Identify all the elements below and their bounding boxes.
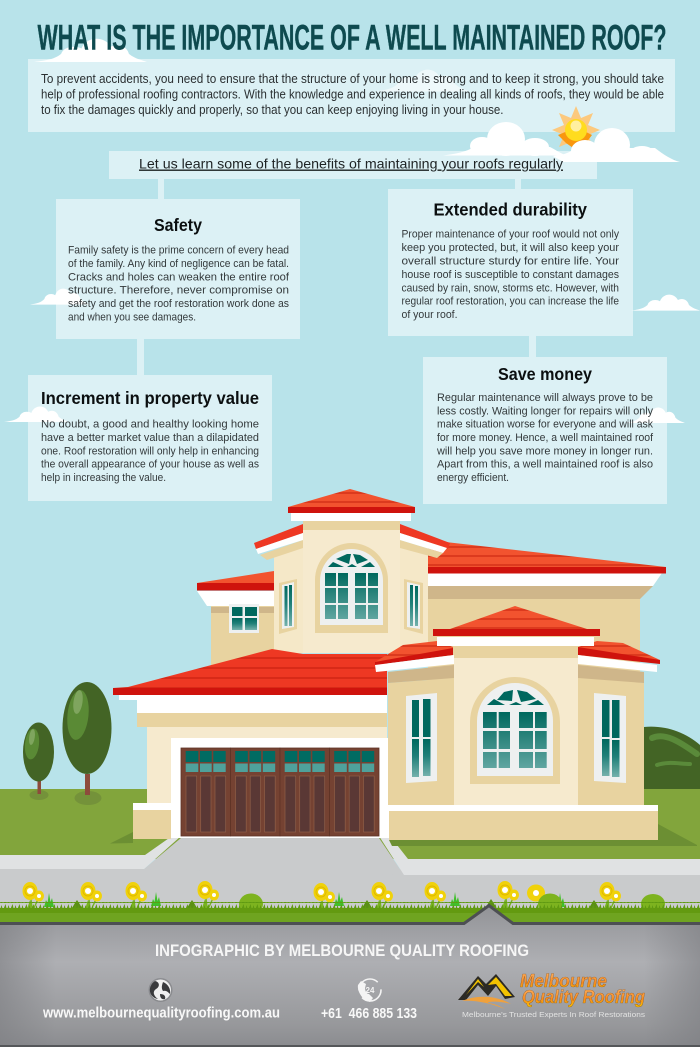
- grass tufts: [44, 892, 599, 908]
- window: front arched: [470, 677, 560, 784]
- house: ground shadows: [110, 824, 697, 846]
- cloud: right lower: [625, 408, 685, 423]
- logo: [458, 971, 645, 1019]
- house: upper right wing: [428, 540, 666, 684]
- window: tower right: [404, 579, 423, 634]
- cloud: top left: [34, 39, 147, 62]
- logo text: [520, 971, 645, 1007]
- house: garage wall: [133, 713, 389, 839]
- icon: globe: [148, 978, 172, 1002]
- panel: safety: [56, 199, 300, 339]
- safety text: safety and get the roof restoration work done as: [68, 298, 289, 310]
- panel: increment in property value: [28, 375, 272, 501]
- increment text: one. Roof restoration will only help in enhancing: [41, 445, 259, 457]
- icon: phone 24: 24: [366, 986, 375, 995]
- right side roof: [578, 641, 660, 672]
- hill: [644, 727, 700, 789]
- panel: introduction: [28, 59, 675, 132]
- save money text: energy efficient.: [437, 472, 509, 484]
- save money text: will help you save more money in longer run.: [436, 445, 653, 457]
- heading: increment in property value: Increment in property value: [41, 388, 259, 408]
- safety text: and when you see damages.: [68, 311, 196, 323]
- save money text: [436, 392, 654, 484]
- logo tagline: Melbourne's Trusted Experts In Roof Restorations: [462, 1010, 645, 1019]
- intro text: to fix the damages quickly and properly, so that you can keep enjoying living in your house.: [41, 102, 504, 117]
- tree: large: [62, 682, 112, 805]
- sidewalk and road: [0, 836, 700, 914]
- save money text: Apart from this, a well maintained roof is also: [437, 459, 653, 471]
- website: www.melbournequalityroofing.com.au: [42, 1006, 280, 1022]
- flowers: [22, 881, 621, 910]
- intro text: [41, 71, 664, 117]
- cloud: left middle: [30, 289, 90, 305]
- left side roof: [375, 641, 454, 672]
- panel: extended durability: [388, 189, 633, 336]
- cloud: left lower: [4, 407, 69, 422]
- house: upper left wing: [197, 571, 274, 666]
- subheading text: Let us learn some of the benefits of maintaining your roofs regularly: [139, 156, 563, 172]
- footer heading: INFOGRAPHIC BY MELBOURNE QUALITY ROOFING: [155, 942, 529, 960]
- cloud: sun right cloud: [553, 128, 680, 162]
- logo text: Quality Roofing: [522, 987, 645, 1007]
- window: front left: [406, 693, 437, 783]
- connectors between panels: [137, 179, 536, 375]
- durability text: house roof is susceptible to constant damages: [402, 269, 619, 281]
- cloud: right middle: [631, 295, 700, 311]
- window: front right: [594, 693, 626, 783]
- increment text: No doubt, a good and healthy looking home: [41, 419, 259, 431]
- durability text: regular roof restoration, you can increase the life: [402, 296, 619, 308]
- safety text: structure. Therefore, never compromise on: [68, 285, 289, 297]
- safety text: Family safety is the prime concern of every head: [68, 244, 289, 256]
- durability text: overall structure sturdy for entire life. Your: [402, 255, 619, 267]
- increment text: [41, 419, 259, 484]
- tree: small: [23, 722, 54, 800]
- panel: save money: [423, 357, 667, 504]
- safety text: Cracks and holes can weaken the entire roof: [68, 271, 290, 283]
- panel: subheading: [109, 151, 597, 179]
- cloud: behind intro panel: [375, 70, 470, 92]
- house: garage door: [181, 748, 379, 836]
- logo text: Melbourne: [520, 971, 607, 991]
- footer background with roof notch: [0, 906, 700, 1047]
- durability text: of your roof.: [402, 309, 458, 321]
- footer: [0, 906, 700, 1047]
- window: upper left wing: [229, 604, 259, 633]
- front roof: [433, 606, 600, 646]
- sun: [552, 106, 600, 154]
- increment text: have a better market value than a dilapidated: [41, 432, 259, 444]
- durability text: keep you protected, but, it will also keep your: [402, 242, 619, 254]
- icon: phone 24: [358, 979, 381, 1002]
- heading: save money: Save money: [498, 364, 592, 384]
- save money text: make situation worse for everyone and will ask: [437, 419, 653, 431]
- house: main lower roof: [113, 649, 387, 713]
- heading: safety: Safety: [154, 215, 202, 235]
- grass band: [0, 902, 700, 922]
- flowers and plants strip: [0, 881, 700, 922]
- durability text: Proper maintenance of your roof would not only: [402, 229, 619, 241]
- house: front right wing: [375, 606, 660, 840]
- increment text: the overall appearance of your house as well as: [41, 459, 259, 471]
- heading: extended durability: Extended durability: [434, 200, 587, 220]
- bushes: [239, 894, 665, 914]
- safety text: [68, 244, 290, 323]
- grass: [0, 789, 700, 859]
- front wing base: [388, 805, 658, 840]
- save money text: for more money. Hence, a well maintained roof: [437, 432, 654, 444]
- window: tower left: [279, 579, 297, 634]
- phone number: +61 466 885 133: [321, 1006, 417, 1022]
- durability text: caused by rain, snow, storms etc. However, with: [402, 282, 619, 294]
- safety text: of the family. Any kind of negligence can be fatal.: [68, 258, 289, 270]
- logo icon: house roofs: [458, 974, 515, 1009]
- tower roof: [288, 489, 415, 521]
- save money text: less costly. Waiting longer for repairs will only: [437, 405, 653, 417]
- increment text: help in increasing the value.: [41, 472, 166, 484]
- window: tower arched: [315, 543, 388, 633]
- cloud: sun left cloud: [443, 122, 566, 156]
- save money text: Regular maintenance will always prove to be: [437, 392, 653, 404]
- house: central tower: [254, 489, 450, 655]
- durability text: [402, 229, 619, 321]
- house: [110, 489, 697, 846]
